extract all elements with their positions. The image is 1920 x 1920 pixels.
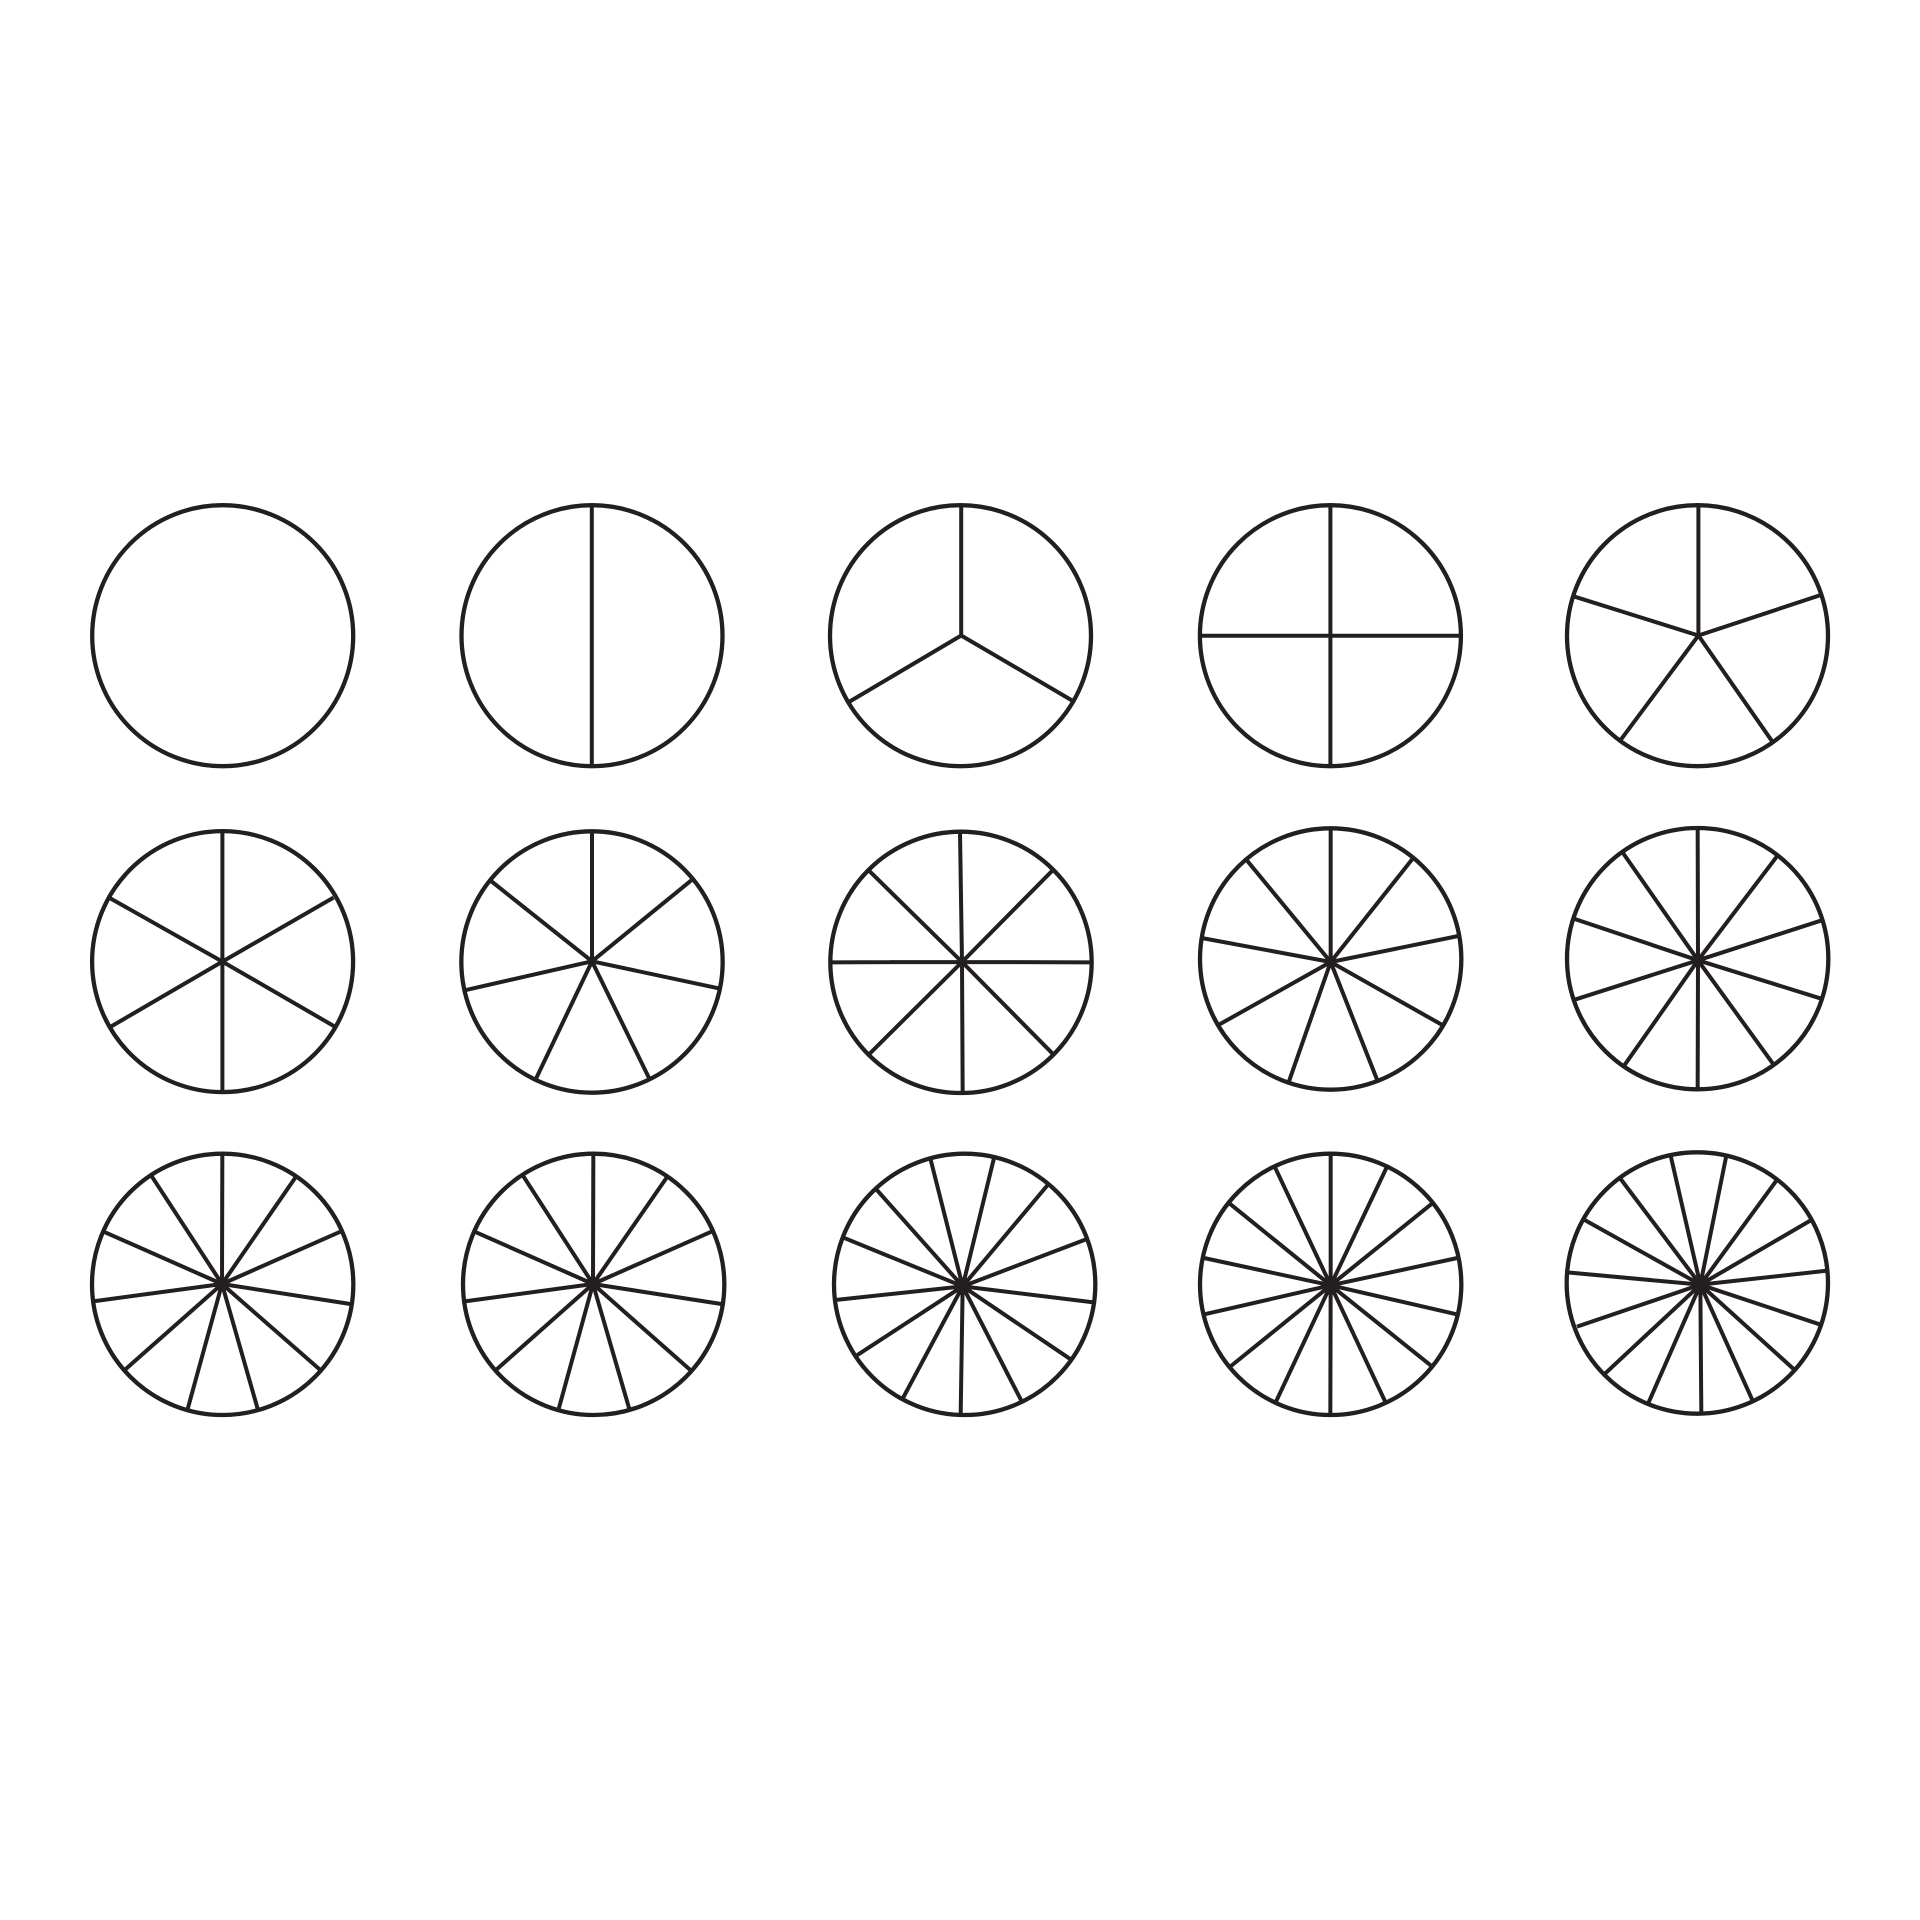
icon: circle with 15 segments	[1567, 1152, 1828, 1414]
icon: circle with 10 segments	[1567, 828, 1828, 1089]
icon: circle with 4 segments	[1200, 504, 1461, 767]
icon: circle with 7 segments	[461, 831, 723, 1093]
icon: circle with 8 segments	[830, 832, 1092, 1093]
icon: circle with 6 segments	[92, 831, 353, 1092]
icon: circle with 2 segments	[462, 504, 722, 767]
icon: circle with 3 segments	[830, 505, 1091, 766]
icon: circle with 11 segments	[92, 1154, 353, 1415]
icon: circle with 14 segments	[1200, 1154, 1461, 1415]
icon: circle with 1 segment	[92, 505, 353, 766]
icon: circle with 9 segments	[1200, 828, 1461, 1090]
icon: circle with 5 segments	[1567, 504, 1828, 766]
icon: circle with 13 segments	[834, 1154, 1095, 1415]
icon: circle with 11 segments, second variant	[463, 1154, 724, 1415]
